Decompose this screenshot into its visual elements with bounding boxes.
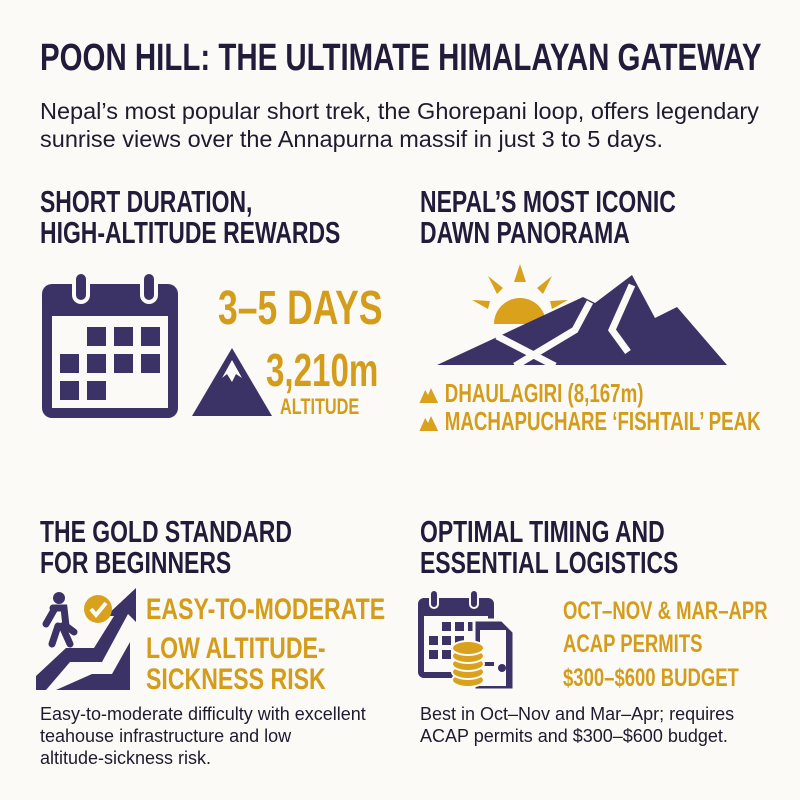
heading: gold standard: THE GOLD STANDARD: [40, 514, 292, 549]
panel: duration icons: ALTITUDE: [280, 394, 359, 419]
stats: logistics: ACAP PERMITS: [563, 630, 702, 658]
heading: short duration: SHORT DURATION,: [40, 184, 252, 219]
stats: difficulty: SICKNESS RISK: [146, 663, 326, 696]
icon: sunrise mountains: [437, 264, 727, 365]
icon: calendar: [42, 274, 178, 418]
list: peaks: MACHAPUCHARE ‘FISHTAIL’ PEAK: [445, 406, 761, 436]
list: peaks: DHAULAGIRI (8,167m): [445, 378, 643, 408]
subtitle: sunrise views over the Annapurna massif in just 3 to 5 days.: [40, 126, 663, 152]
heading: short duration: HIGH-ALTITUDE REWARDS: [40, 215, 340, 250]
body text: logistics: Best in Oct–Nov and Mar–Apr; requires: [420, 704, 734, 724]
stats: difficulty: EASY-TO-MODERATE: [146, 593, 385, 626]
heading: gold standard: FOR BEGINNERS: [40, 545, 231, 580]
subtitle: [40, 98, 759, 152]
body text: beginners: [40, 704, 366, 768]
stat: altitude: 3,210m: [266, 344, 378, 396]
stats: difficulty: LOW ALTITUDE-: [146, 632, 326, 665]
heading: timing: [420, 514, 678, 580]
heading: timing: OPTIMAL TIMING AND: [420, 514, 665, 549]
stats: logistics: $300–$600 BUDGET: [563, 664, 739, 692]
body text: logistics: [420, 704, 734, 746]
heading: gold standard: [40, 514, 292, 580]
heading: dawn panorama: NEPAL’S MOST ICONIC: [420, 184, 676, 219]
heading: timing: ESSENTIAL LOGISTICS: [420, 545, 678, 580]
panel: duration icons: [42, 274, 383, 419]
stat: days: 3–5 DAYS: [218, 282, 383, 335]
heading: dawn panorama: DAWN PANORAMA: [420, 215, 630, 250]
stats: difficulty: [146, 593, 385, 696]
body text: beginners: teahouse infrastructure and low: [40, 726, 291, 746]
body text: logistics: ACAP permits and $300–$600 budget.: [420, 726, 728, 746]
body text: beginners: altitude-sickness risk.: [40, 748, 211, 768]
icon: calendar, permit, coins: [418, 591, 512, 688]
icon: mountain: [192, 348, 272, 416]
icon: hiker on rising arrow: [36, 588, 136, 690]
heading: short duration: [40, 184, 340, 250]
stats: logistics: OCT–NOV & MAR–APR: [563, 597, 768, 625]
list: peaks: [420, 378, 761, 436]
heading: dawn panorama: [420, 184, 676, 250]
title: POON HILL: THE ULTIMATE HIMALAYAN GATEWAY: [40, 37, 762, 79]
subtitle: Nepal’s most popular short trek, the Ghorepani loop, offers legendary: [40, 98, 759, 124]
stats: logistics: [563, 597, 768, 692]
body text: beginners: Easy-to-moderate difficulty with excellent: [40, 704, 366, 724]
